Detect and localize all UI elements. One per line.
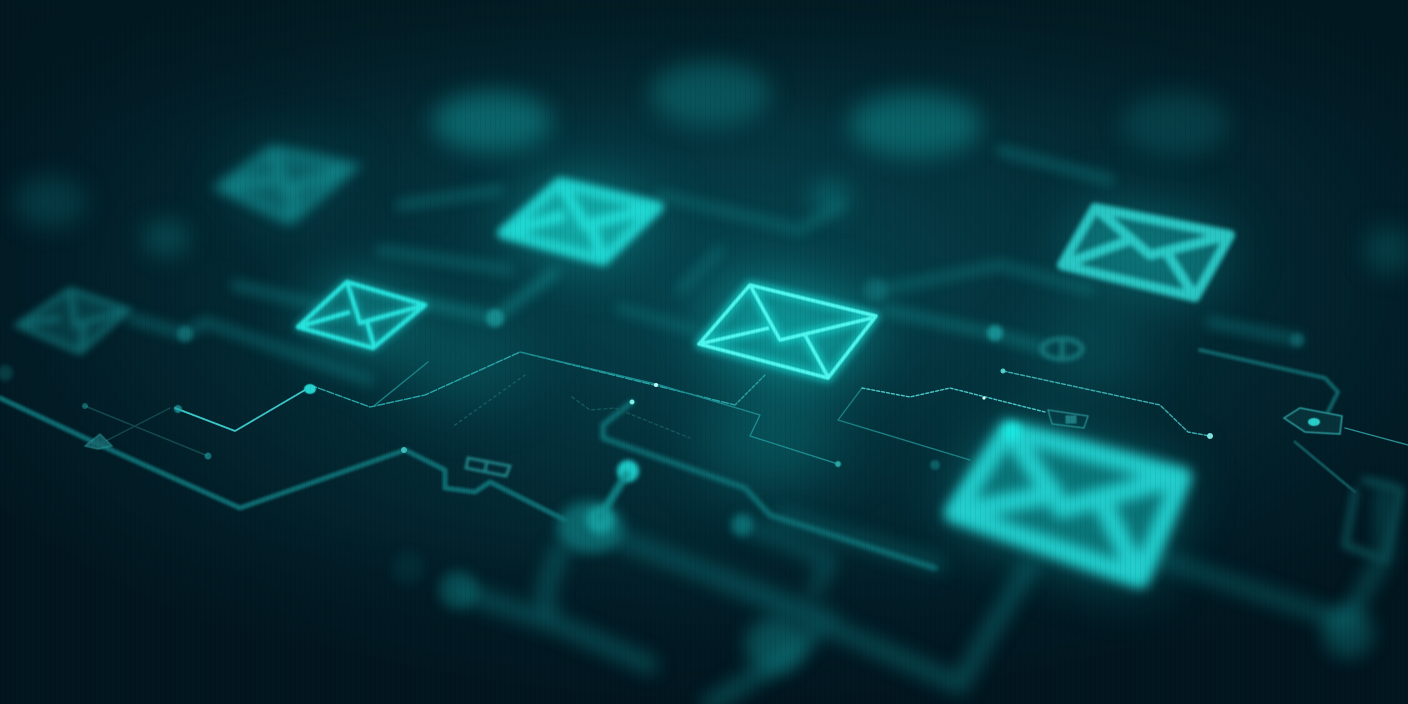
blurred foreground nodes [392,460,1374,673]
envelope glows [220,150,1230,583]
envelope: right glowing [1062,208,1230,297]
blurred background envelopes [14,62,1408,274]
envelope: left sharp [298,282,425,348]
envelope: lower right large blurred [948,423,1182,583]
icon: blurred lock [1042,339,1082,359]
envelope: upper centre glowing [503,183,658,260]
icon: small chip [1048,410,1088,428]
icon: eye node [1284,408,1342,434]
envelope: upper left blurred [220,150,353,220]
mid-depth circuit traces [130,150,1300,380]
envelope: centre main sharp [699,285,876,378]
fine focus circuit traces [85,352,1408,464]
icon: small triangle [85,434,112,449]
small circuit icons [85,339,1342,476]
node: hub [557,501,623,553]
icon: small badge [466,458,510,476]
thick near-focus circuit traces [0,350,1400,568]
blurred foreground circuit traces [458,490,1385,704]
envelope: far left faint [18,290,128,352]
circuit nodes [0,278,1304,470]
